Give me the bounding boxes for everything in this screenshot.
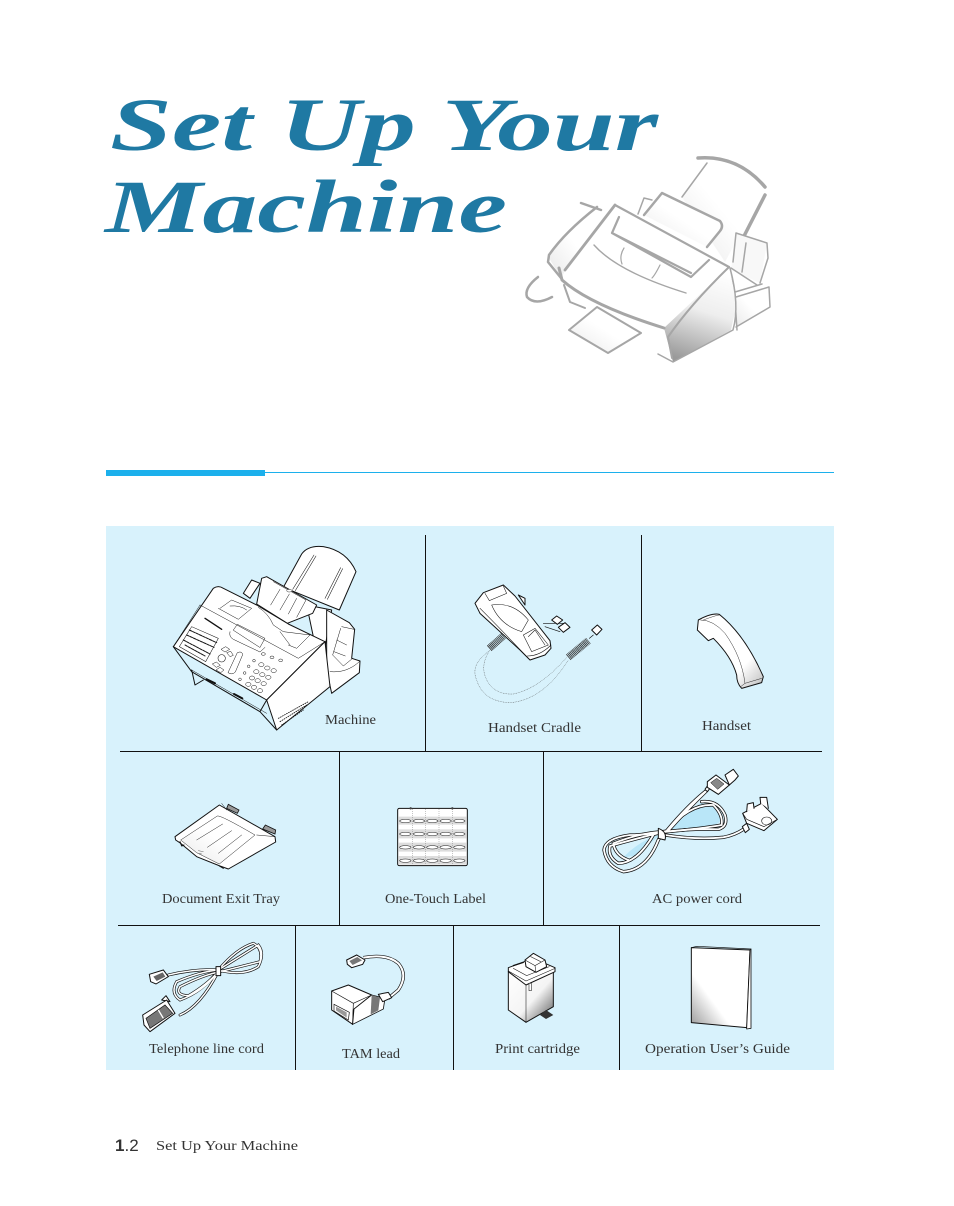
label: Document Exit Tray: Document Exit Tray <box>162 891 280 906</box>
label: Handset Cradle: Handset Cradle <box>488 720 581 735</box>
item: one-touch label <box>385 808 486 906</box>
icon: TAM adapter <box>332 955 403 1024</box>
icon: manual book <box>691 946 751 1029</box>
label: Handset: Handset <box>702 718 751 733</box>
illustration: fax machine sketch <box>526 158 770 362</box>
page number: 1.2 <box>115 1136 139 1155</box>
panel: package contents <box>106 526 834 1070</box>
item: telephone line cord <box>143 943 264 1056</box>
item: print cartridge <box>495 953 580 1056</box>
icon: handset <box>697 614 763 688</box>
title: Machine <box>104 166 507 249</box>
label: TAM lead: TAM lead <box>342 1046 400 1061</box>
icon: cradle with coiled cords <box>475 585 602 703</box>
footer running title: Set Up Your Machine <box>156 1138 298 1153</box>
section rule <box>106 470 834 476</box>
item: document exit tray <box>162 803 280 906</box>
title <box>104 84 659 249</box>
icon: telephone cord <box>143 943 262 1032</box>
icon: power cord <box>604 769 777 872</box>
item: handset cradle <box>475 585 602 735</box>
label: AC power cord: AC power cord <box>652 891 742 906</box>
label: Telephone line cord: Telephone line cord <box>149 1041 264 1056</box>
label: One-Touch Label: One-Touch Label <box>385 891 486 906</box>
icon: print cartridge <box>508 953 555 1022</box>
label: Print cartridge: Print cartridge <box>495 1041 580 1056</box>
icon: tray <box>175 803 276 869</box>
item: operation user's guide <box>645 946 790 1056</box>
icon: label sheet <box>398 808 467 866</box>
item: machine <box>173 546 376 730</box>
item: TAM lead <box>332 955 403 1061</box>
item: handset <box>697 614 763 733</box>
item: AC power cord <box>604 769 777 906</box>
icon: fax machine <box>173 546 360 730</box>
label: Operation User's Guide: Operation User’s Guide <box>645 1041 790 1056</box>
title: Set Up Your <box>110 84 659 167</box>
label: Machine: Machine <box>325 712 376 727</box>
